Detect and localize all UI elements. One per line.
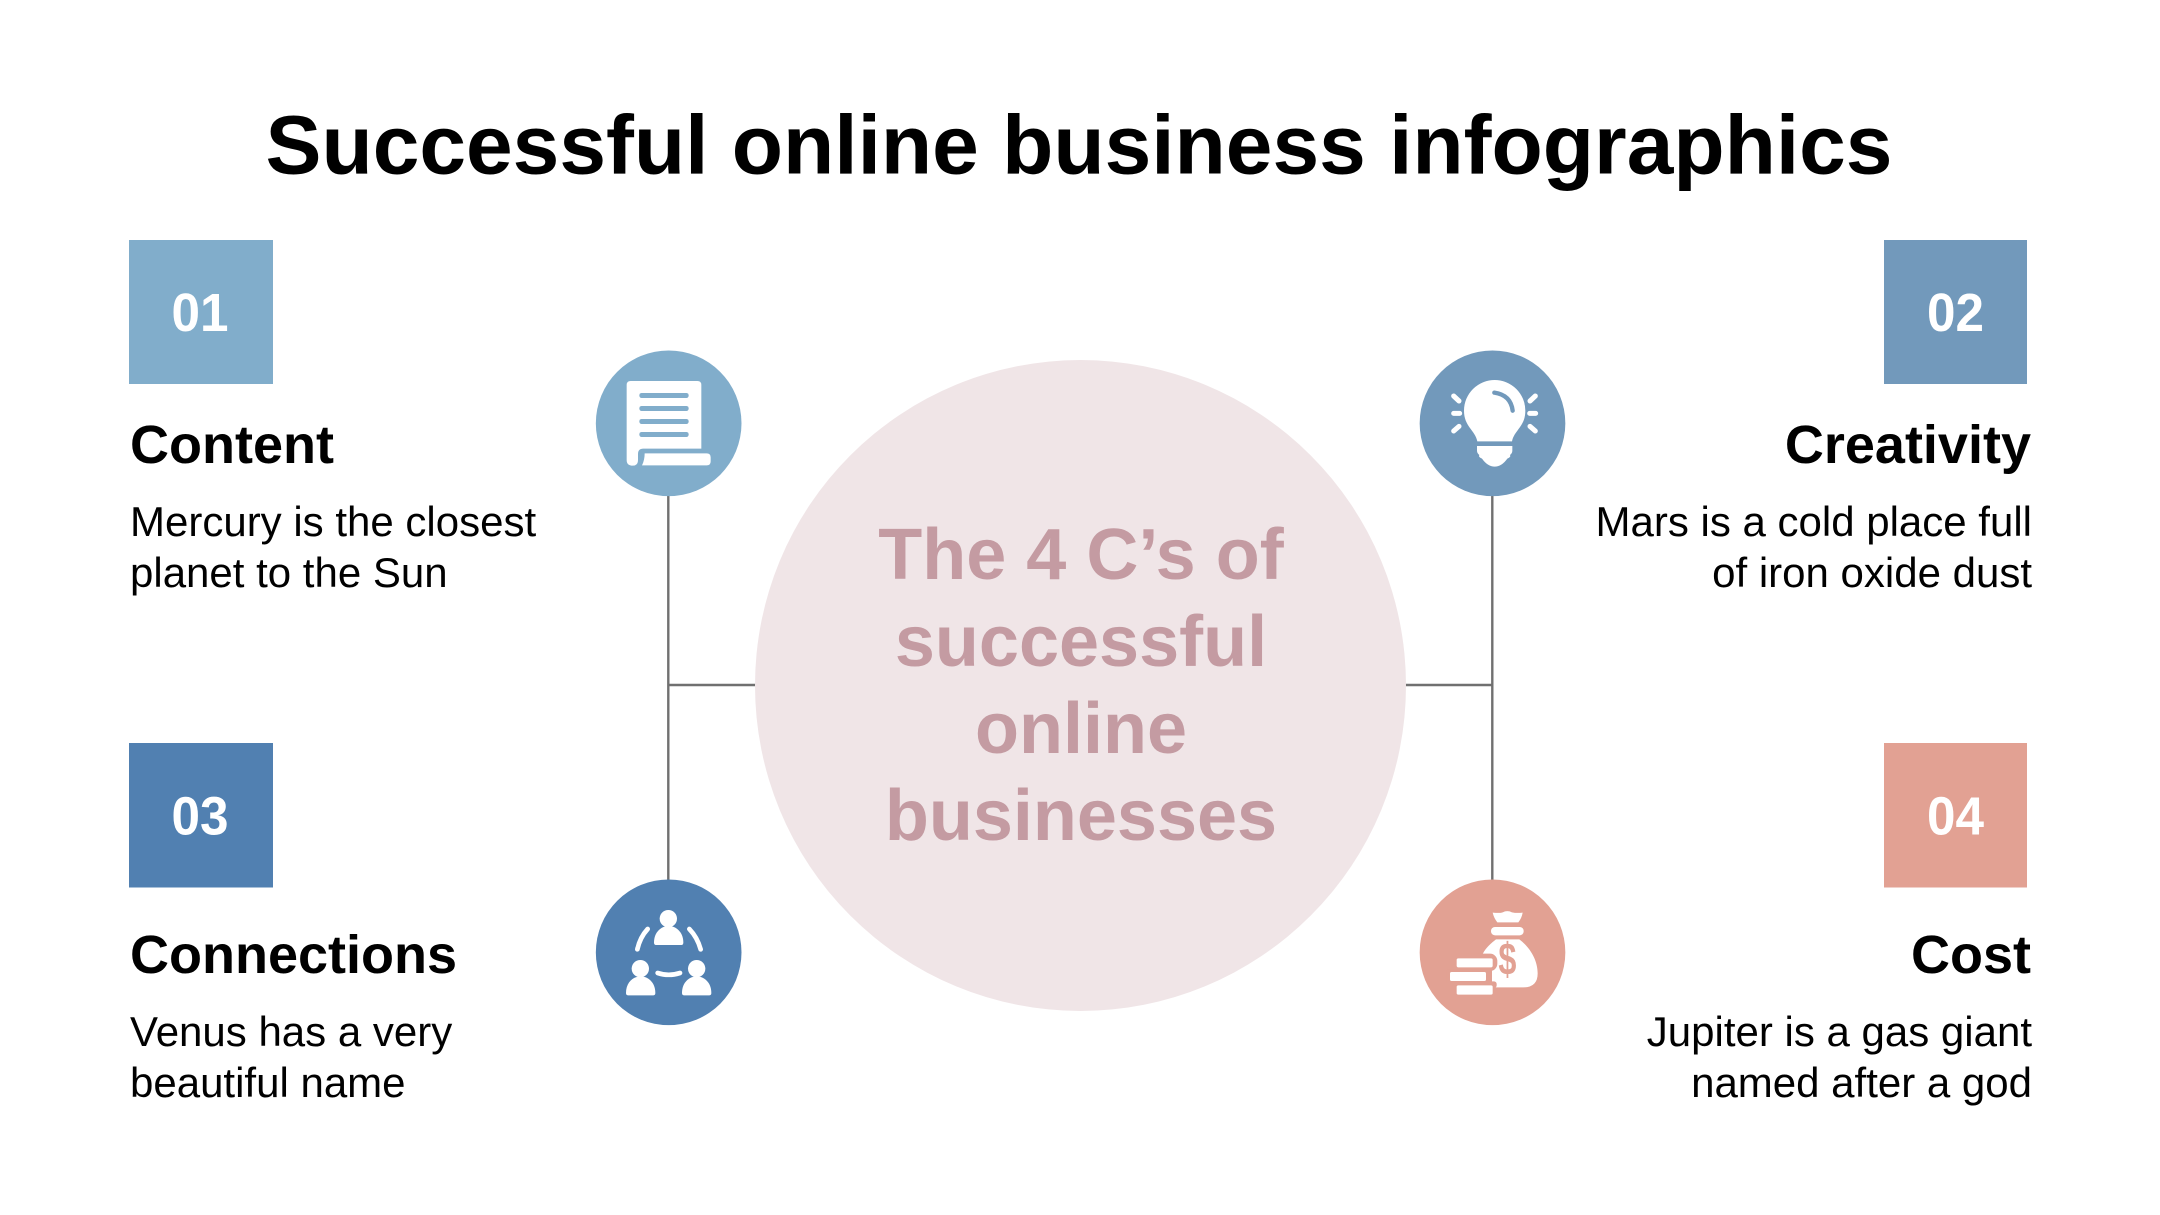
number badge 04: 04	[1927, 786, 1984, 846]
number badge 03: 03	[172, 786, 228, 846]
text: connections description: Venus has a very	[130, 1008, 452, 1055]
title: Successful online business infographics	[266, 98, 1892, 192]
icon: document scroll	[596, 350, 741, 496]
number badge 01: 01	[172, 283, 228, 343]
number badge 02: 02	[1927, 283, 1984, 343]
panel: 03 connections	[129, 743, 457, 1106]
text: content description: Mercury is the closest	[130, 498, 536, 545]
text: creativity description: of iron oxide dust	[1712, 549, 2032, 596]
icon: money bag and coins	[1420, 879, 1565, 1025]
text: connections description: beautiful name	[130, 1059, 406, 1106]
panel: 04 cost	[1647, 743, 2032, 1106]
center circle with text: successful	[895, 602, 1267, 682]
text: cost description: Jupiter is a gas giant	[1647, 1008, 2032, 1055]
text: creativity description: Mars is a cold place full	[1595, 498, 2032, 545]
text: content description: planet to the Sun	[130, 549, 448, 596]
panel: 02 creativity	[1595, 240, 2032, 596]
heading: content: Content	[130, 415, 334, 475]
number badge 04	[1884, 743, 2027, 888]
heading: connections: Connections	[130, 925, 457, 985]
number badge 01	[129, 240, 273, 384]
icon: connected people	[596, 879, 741, 1025]
text: cost description: named after a god	[1691, 1059, 2032, 1106]
center circle with text: online	[975, 689, 1187, 769]
center circle with text: businesses	[885, 776, 1277, 856]
heading: creativity: Creativity	[1785, 415, 2031, 475]
icon: light bulb	[1420, 350, 1565, 496]
center circle with text	[755, 360, 1406, 1011]
center circle with text: The 4 C’s of	[878, 515, 1285, 595]
connector lines	[668, 490, 1492, 885]
icon: money bag and coins: $	[1498, 935, 1517, 985]
number badge 02	[1884, 240, 2027, 384]
panel: 01 content	[129, 240, 536, 596]
number badge 03	[129, 743, 273, 888]
heading: cost: Cost	[1911, 925, 2031, 985]
